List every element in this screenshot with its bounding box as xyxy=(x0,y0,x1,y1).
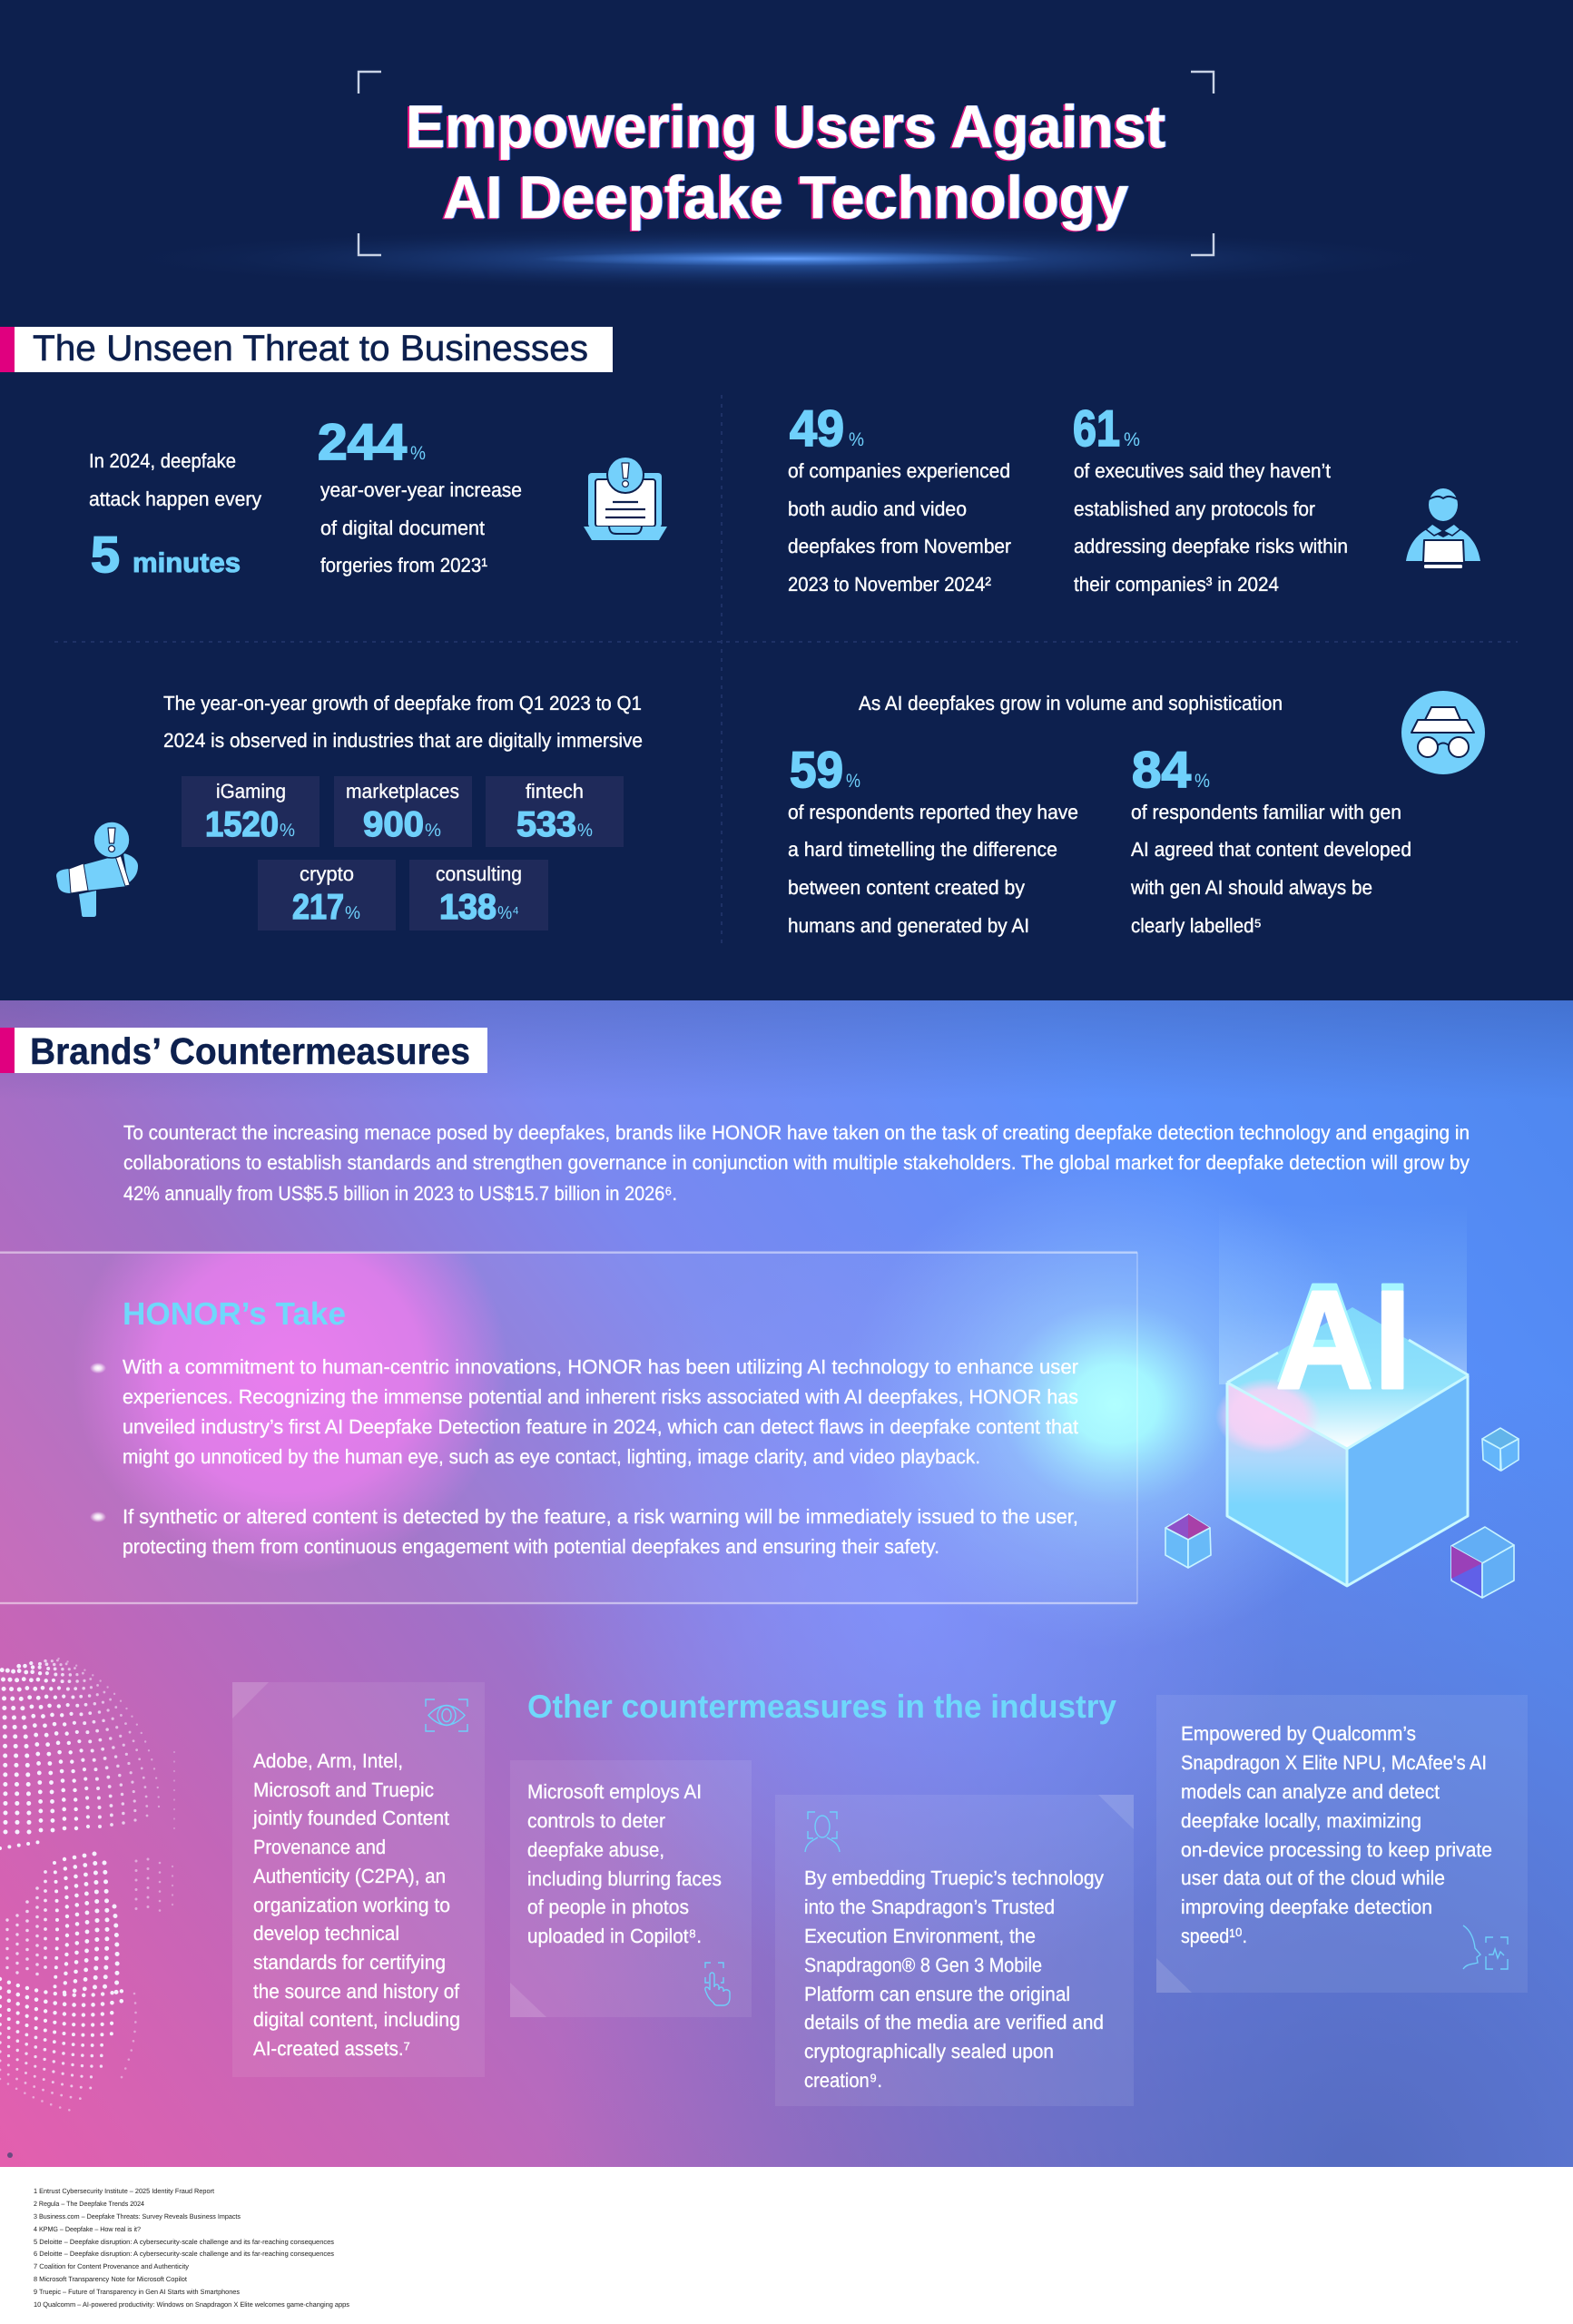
footnotes: 10 Qualcomm – AI-powered productivity: Windows on Snapdragon X Elite welcomes game-changing apps xyxy=(34,2300,349,2309)
light beam xyxy=(1219,1203,1467,1384)
illustration: dotted head xyxy=(0,1658,174,2112)
stat: 59%: humans and generated by AI xyxy=(788,914,1029,937)
card text: Snapdragon® 8 Gen 3 Mobile xyxy=(804,1954,1042,1976)
stat: 59%: % xyxy=(846,771,860,792)
stat: 61%: addressing deepfake risks within xyxy=(1074,535,1348,557)
stat: 59%: 59 xyxy=(790,741,843,798)
card text: deepfake locally, maximizing xyxy=(1181,1809,1421,1832)
paragraph 1: unveiled industry’s first AI Deepfake Detection feature in 2024, which can detect flaws in deepfake content that xyxy=(123,1415,1078,1438)
stat: attack frequency: 5 xyxy=(91,526,120,583)
stat: 49%: both audio and video xyxy=(788,497,967,520)
bullet 2 xyxy=(90,1512,106,1522)
card: McAfee xyxy=(1156,1695,1528,1993)
stat: 49%: deepfakes from November xyxy=(788,535,1011,557)
pink glow xyxy=(89,1253,498,1560)
stat box: crypto xyxy=(258,860,396,931)
icon: small cube left xyxy=(1165,1514,1211,1568)
stat box: fintech: 533 xyxy=(516,805,576,844)
stat box: consulting: 138 xyxy=(439,888,496,927)
paragraph 2 xyxy=(123,1505,1078,1558)
card text: models can analyze and detect xyxy=(1181,1780,1440,1803)
stat: 49%: 2023 to November 2024² xyxy=(788,573,991,596)
icon: voice face scan xyxy=(1463,1925,1508,1969)
card text: cryptographically sealed upon xyxy=(804,2040,1054,2063)
bullet 1 xyxy=(90,1363,106,1374)
icon: eye scan xyxy=(426,1699,467,1731)
card text: including blurring faces xyxy=(527,1867,722,1890)
card text: the source and history of xyxy=(253,1980,460,2003)
card text: details of the media are verified and xyxy=(804,2011,1104,2034)
card text: standards for certifying xyxy=(253,1951,446,1974)
sophistication heading: As AI deepfakes grow in volume and sophistication xyxy=(859,692,1283,714)
stat box: consulting: consulting xyxy=(436,862,522,885)
icon: small cube bottom right xyxy=(1451,1527,1514,1598)
card text: Execution Environment, the xyxy=(804,1925,1036,1947)
stat: 84%: % xyxy=(1194,771,1210,792)
footnotes: 6 Deloitte – Deepfake disruption: A cybersecurity-scale challenge and its far-reaching consequences xyxy=(34,2250,334,2258)
card text: deepfake abuse, xyxy=(527,1838,664,1861)
stat: 61%: 61 xyxy=(1073,399,1120,457)
footnotes: 7 Coalition for Content Provenance and Authenticity xyxy=(34,2262,189,2270)
card text: By embedding Truepic’s technology xyxy=(804,1866,1104,1889)
intro paragraph: 42% annually from US$5.5 billion in 2023 to US$15.7 billion in 2026⁶. xyxy=(123,1182,677,1205)
stat: 244%: year-over-year increase xyxy=(320,478,522,501)
stat: 61% xyxy=(1073,399,1348,596)
stat: 61%: established any protocols for xyxy=(1074,497,1315,520)
paragraph 1: experiences. Recognizing the immense potential and inherent risks associated with AI deepfakes, HONOR has xyxy=(123,1385,1078,1408)
stat: attack frequency: attack happen every xyxy=(89,487,261,510)
stat box: consulting: %⁴ xyxy=(497,903,519,923)
title corner brackets xyxy=(359,72,1214,255)
intro paragraph: collaborations to establish standards and strengthen governance in conjunction with multiple stakeholders. The global market for deepfake detection will grow by xyxy=(123,1151,1470,1174)
cyan glow xyxy=(842,1159,1387,1649)
stat box: iGaming: iGaming xyxy=(216,780,286,803)
heading: HONOR’s Take xyxy=(123,1296,346,1332)
title xyxy=(406,93,1165,231)
footer background xyxy=(0,2167,1573,2324)
card text: jointly founded Content xyxy=(252,1807,449,1829)
paragraph 1: might go unnoticed by the human eye, such as eye contact, lighting, image clarity, and video playback. xyxy=(123,1445,980,1468)
footnotes: 4 KPMG – Deepfake – How real is it? xyxy=(34,2225,141,2233)
stat box: fintech: fintech xyxy=(526,780,584,803)
card text xyxy=(527,1780,722,1947)
footnotes xyxy=(34,2187,349,2309)
section heading: threat: The Unseen Threat to Businesses xyxy=(33,329,588,369)
stat: 84%: AI agreed that content developed xyxy=(1131,838,1411,861)
card text xyxy=(1181,1722,1492,1947)
icon: hand scan xyxy=(705,1963,730,2005)
card text xyxy=(252,1749,460,2060)
card: C2PA xyxy=(232,1682,485,2077)
card text: digital content, including xyxy=(253,2008,460,2031)
paragraph 1: With a commitment to human-centric innovations, HONOR has been utilizing AI technology to enhance user xyxy=(123,1355,1078,1378)
stat: 244% xyxy=(318,413,522,576)
icon: spy xyxy=(1401,691,1485,774)
title: AI Deepfake Technology xyxy=(443,163,1128,231)
card text: uploaded in Copilot⁸. xyxy=(527,1925,702,1947)
stat: 61%: of executives said they haven’t xyxy=(1074,459,1331,482)
stat box: crypto: % xyxy=(345,903,360,923)
footnotes: 5 Deloitte – Deepfake disruption: A cybersecurity-scale challenge and its far-reaching consequences xyxy=(34,2238,334,2246)
card text: speed¹⁰. xyxy=(1181,1925,1247,1947)
small dot xyxy=(7,2152,13,2158)
card text: develop technical xyxy=(253,1922,399,1945)
card text: controls to deter xyxy=(527,1809,665,1832)
icon: small cube right xyxy=(1482,1428,1519,1471)
card text: Microsoft and Truepic xyxy=(253,1778,434,1801)
stat: 59%: of respondents reported they have xyxy=(788,801,1078,823)
card text: AI-created assets.⁷ xyxy=(253,2037,410,2060)
stat box: iGaming: % xyxy=(280,821,295,841)
icon: person at laptop xyxy=(1406,488,1480,568)
stat: attack frequency xyxy=(89,449,261,583)
stat box: marketplaces: marketplaces xyxy=(346,780,459,803)
footnotes: 8 Microsoft Transparency Note for Microsoft Copilot xyxy=(34,2275,188,2283)
card: Truepic xyxy=(775,1795,1134,2106)
title glow xyxy=(96,226,1476,291)
stat box: marketplaces: % xyxy=(425,821,441,841)
stat: 49%: of companies experienced xyxy=(788,459,1010,482)
stat box: marketplaces: 900 xyxy=(363,805,424,844)
panel: HONOR's Take xyxy=(0,1253,1137,1603)
paragraph 1 xyxy=(123,1355,1078,1468)
stat: 61%: their companies³ in 2024 xyxy=(1074,573,1279,596)
stat: 84% xyxy=(1130,741,1411,937)
stat: 49%: 49 xyxy=(790,399,844,457)
card text: improving deepfake detection xyxy=(1181,1896,1432,1918)
card text: Empowered by Qualcomm’s xyxy=(1181,1722,1416,1745)
stat: attack frequency: In 2024, deepfake xyxy=(89,449,236,472)
card text: on-device processing to keep private xyxy=(1181,1838,1492,1861)
stat: 244%: forgeries from 2023¹ xyxy=(320,554,487,576)
title: Empowering Users Against xyxy=(406,93,1165,160)
card text: Platform can ensure the original xyxy=(804,1983,1070,2005)
stat: 59%: a hard timetelling the difference xyxy=(788,838,1057,861)
stat box: iGaming xyxy=(182,776,320,847)
card: Microsoft xyxy=(510,1760,752,2017)
growth intro text xyxy=(163,692,643,752)
stat: attack frequency: minutes xyxy=(133,548,241,578)
stat: 61%: % xyxy=(1124,429,1140,450)
heading: other countermeasures: Other countermeasures in the industry xyxy=(527,1688,1116,1725)
card text: user data out of the cloud while xyxy=(1181,1866,1445,1889)
stat: 84%: 84 xyxy=(1132,741,1191,798)
stat box: fintech xyxy=(486,776,624,847)
card text: Authenticity (C2PA), an xyxy=(253,1865,446,1887)
intro paragraph xyxy=(123,1121,1470,1205)
card text: Provenance and xyxy=(253,1836,386,1858)
card text: Snapdragon X Elite NPU, McAfee's AI xyxy=(1181,1751,1487,1774)
card text: of people in photos xyxy=(527,1896,689,1918)
card text: Adobe, Arm, Intel, xyxy=(253,1749,403,1772)
dark background xyxy=(0,0,1573,1000)
stat: 244%: 244 xyxy=(318,413,407,470)
stat box: consulting xyxy=(409,860,548,931)
section heading: countermeasures: Brands’ Countermeasures xyxy=(30,1030,470,1072)
stat: 49% xyxy=(788,399,1011,596)
card text: organization working to xyxy=(253,1894,450,1916)
footnotes: 1 Entrust Cybersecurity Institute – 2025 Identity Fraud Report xyxy=(34,2187,215,2195)
card text: Microsoft employs AI xyxy=(527,1780,702,1803)
footnotes: 3 Business.com – Deepfake Threats: Survey Reveals Business Impacts xyxy=(34,2212,241,2221)
growth intro text: 2024 is observed in industries that are digitally immersive xyxy=(163,729,643,752)
stat: 84%: with gen AI should always be xyxy=(1130,876,1372,899)
stat: 244%: % xyxy=(410,443,426,464)
stat: 84%: clearly labelled⁵ xyxy=(1131,914,1262,937)
icon: face scan xyxy=(805,1812,840,1852)
stat box: fintech: % xyxy=(577,821,593,841)
stat: 59%: between content created by xyxy=(788,876,1025,899)
card text: into the Snapdragon’s Trusted xyxy=(804,1896,1055,1918)
stat: 244%: of digital document xyxy=(320,517,485,539)
footnotes: 9 Truepic – Future of Transparency in Gen AI Starts with Smartphones xyxy=(34,2288,240,2296)
icon: megaphone xyxy=(56,822,138,917)
stat box: iGaming: 1520 xyxy=(205,805,279,844)
stat: 84%: of respondents familiar with gen xyxy=(1131,801,1401,823)
paragraph 2: protecting them from continuous engagement with potential deepfakes and ensuring their safety. xyxy=(123,1535,939,1558)
stat box: crypto: 217 xyxy=(292,888,344,927)
intro paragraph: To counteract the increasing menace posed by deepfakes, brands like HONOR have taken on the task of creating deepfake detection technology and engaging in xyxy=(123,1121,1470,1144)
footnotes: 2 Regula – The Deepfake Trends 2024 xyxy=(34,2200,144,2208)
icon: laptop alert xyxy=(584,457,667,540)
stat: 59% xyxy=(788,741,1078,937)
card text xyxy=(804,1866,1104,2092)
stat: 49%: % xyxy=(849,429,864,450)
stat box: crypto: crypto xyxy=(300,862,354,885)
illustration: AI cube xyxy=(1215,1262,1469,1586)
card text: creation⁹. xyxy=(804,2069,882,2092)
gradient background xyxy=(0,1000,1573,2167)
stat box: marketplaces xyxy=(334,776,472,847)
growth intro text: The year-on-year growth of deepfake from Q1 2023 to Q1 xyxy=(163,692,642,714)
AI letters: AI xyxy=(1275,1262,1411,1418)
paragraph 2: If synthetic or altered content is detected by the feature, a risk warning will be immediately issued to the user, xyxy=(123,1505,1078,1528)
